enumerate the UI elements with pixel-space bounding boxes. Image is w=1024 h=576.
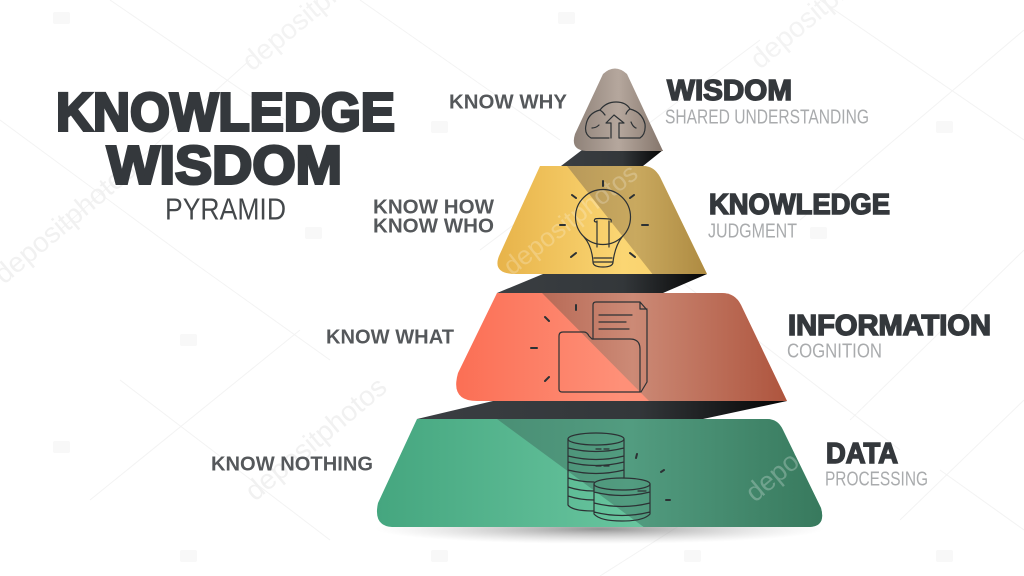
icon: database coins [568,433,670,521]
title: WISDOM [107,136,342,196]
label: wisdom [665,75,869,128]
base shadow [375,514,825,544]
background watermark lines: depositphotos [239,371,392,507]
title: KNOWLEDGE [56,82,395,142]
label: know how know who [373,196,494,238]
title: PYRAMID [165,192,286,226]
dark connector bands [417,150,787,419]
label: knowledge: KNOWLEDGE [709,189,890,221]
icon: document and folder [531,302,647,392]
label: wisdom: WISDOM [667,75,792,107]
tier: data [376,419,822,527]
label: information: COGNITION [787,340,882,362]
label: information: INFORMATION [788,310,991,342]
tier: knowledge [497,166,707,274]
label: know nothing: KNOW NOTHING [211,454,373,476]
tier: information [456,293,800,402]
icon: light bulb [560,181,648,267]
label: know what: KNOW WHAT [326,326,454,348]
tier: wisdom [574,68,663,151]
label: know why: KNOW WHY [449,92,568,114]
icon: cloud upload [586,102,645,138]
label: knowledge [708,189,890,242]
label: data [825,438,928,490]
title [56,82,395,226]
label: data: DATA [826,438,898,470]
label: information [787,310,991,362]
watermark on knowledge: depositphotos [497,157,643,281]
label: wisdom: SHARED UNDERSTANDING [665,106,869,128]
label: know how know who: KNOW HOW [373,196,494,218]
label: data: PROCESSING [825,468,928,490]
watermark on data: depositphotos [740,377,888,508]
label: know how know who: KNOW WHO [373,216,494,238]
label: knowledge: JUDGMENT [708,220,797,242]
pyramid [376,68,822,542]
